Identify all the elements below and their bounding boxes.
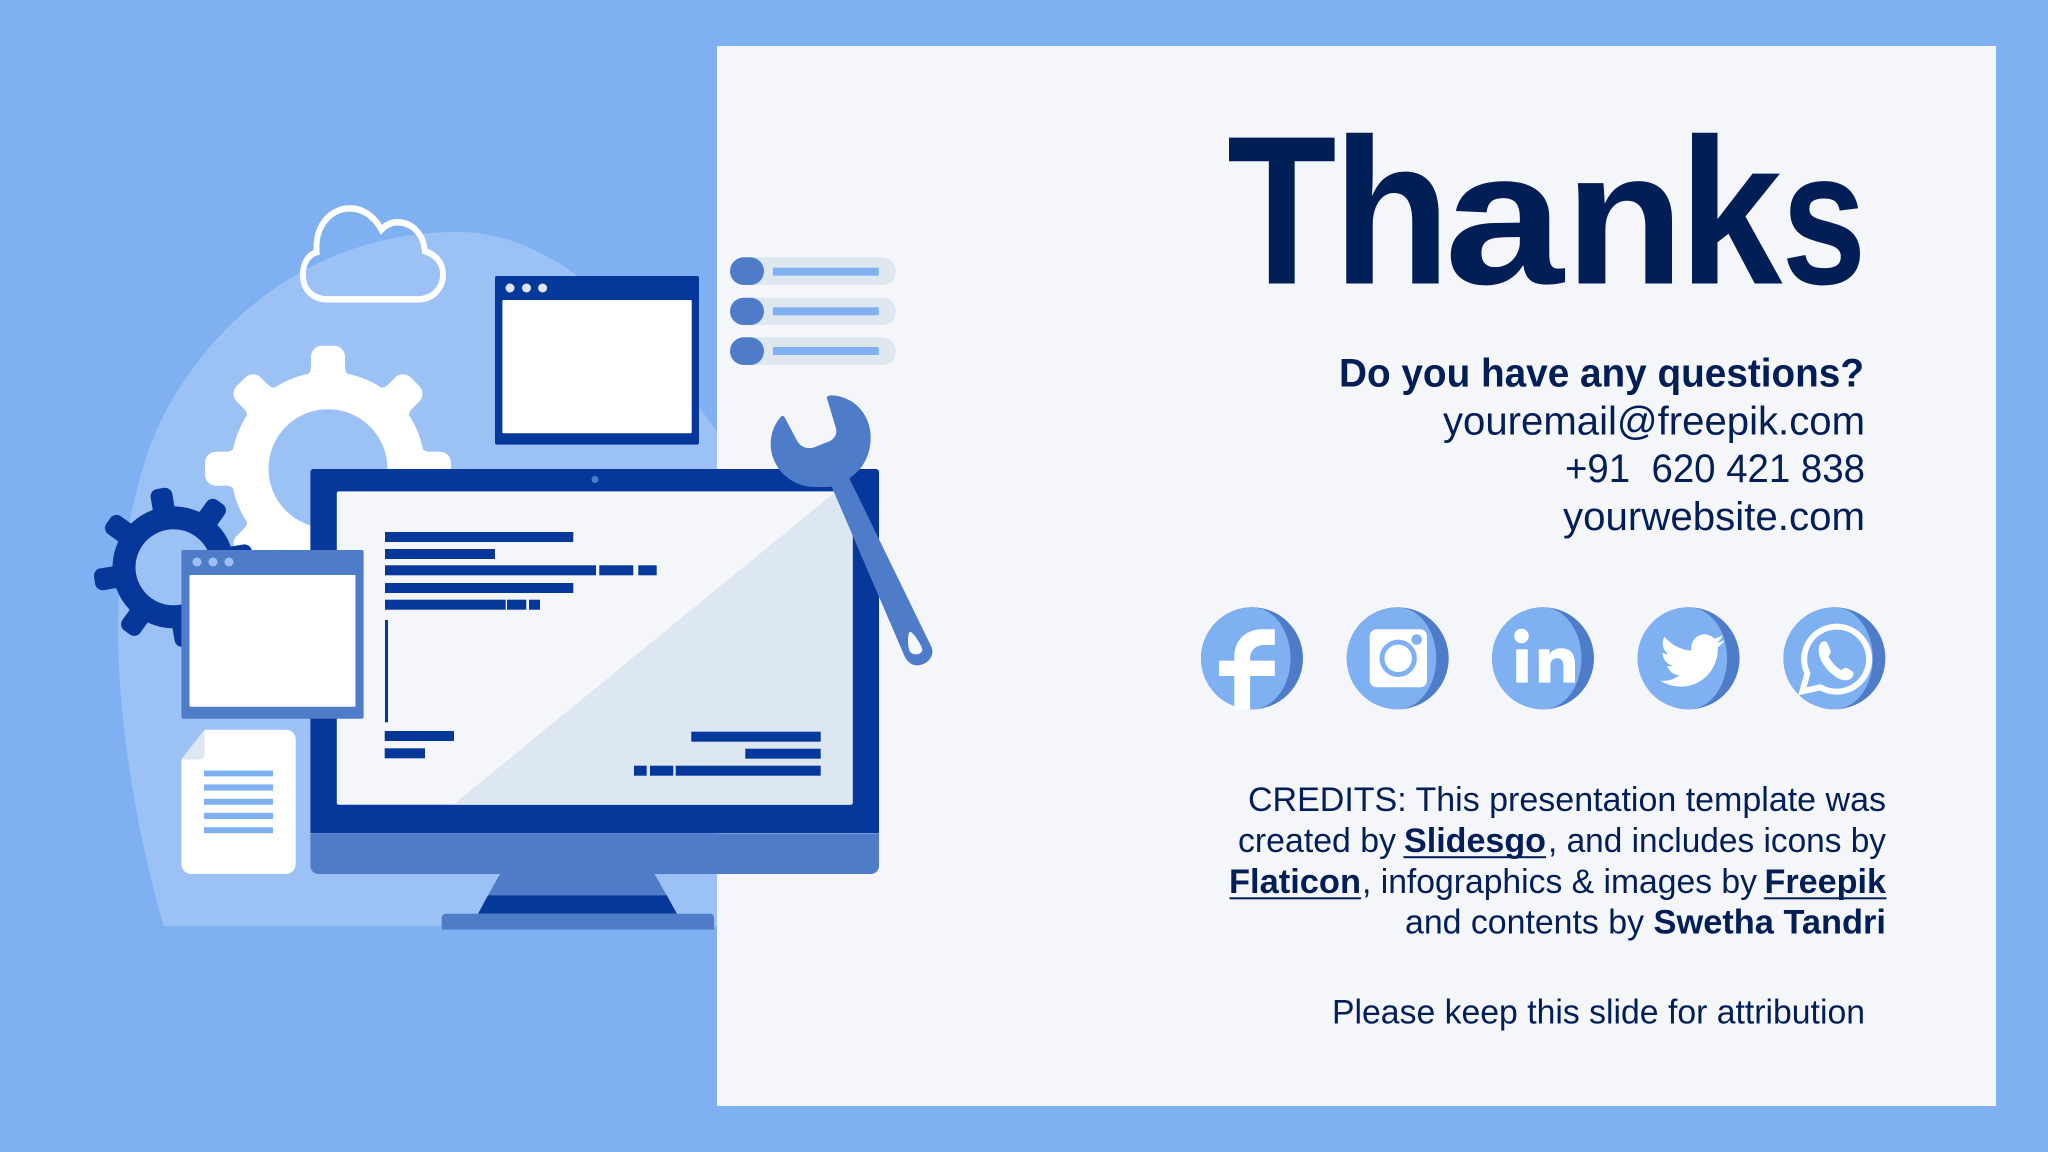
title: a — [1444, 112, 1565, 324]
code lines — [385, 532, 821, 776]
credits line 2 — [1238, 822, 1886, 860]
monitor body — [310, 469, 879, 833]
credits line 4 — [1405, 904, 1886, 942]
monitor screen — [337, 491, 853, 805]
title: k — [1679, 96, 1783, 328]
attribution note: Please keep this slide for attribution — [1332, 994, 1865, 1032]
credits line 4: and contents by — [1405, 904, 1644, 942]
title: s — [1782, 112, 1866, 324]
title — [1227, 92, 1866, 328]
icon: dark gear — [81, 475, 266, 659]
credits line 3: Freepik — [1764, 863, 1886, 901]
icon: cloud — [303, 208, 443, 299]
contact block — [1339, 352, 1865, 539]
icon: facebook — [1201, 607, 1303, 709]
social icons — [1201, 607, 1885, 709]
icon: twitter — [1638, 607, 1740, 709]
credits line 2: Slidesgo — [1404, 822, 1546, 860]
credits line 2: , and includes icons by — [1548, 822, 1886, 860]
panel: content card — [717, 46, 1996, 1106]
browser window: dark — [495, 276, 699, 445]
credits text — [1229, 781, 1886, 942]
icon: instagram — [1347, 607, 1449, 709]
title: h — [1333, 96, 1451, 328]
credits line 3: , infographics & images by — [1362, 863, 1757, 901]
icon: wrench — [771, 395, 932, 665]
title: n — [1565, 112, 1684, 324]
icon: document — [181, 730, 296, 874]
monitor chin — [310, 833, 879, 874]
screen diagonal — [453, 491, 853, 805]
list pills — [730, 257, 896, 365]
credits line 1: CREDITS: This presentation template was — [1248, 781, 1886, 819]
icon: white gear — [205, 346, 451, 575]
background blob — [118, 232, 717, 926]
icon: whatsapp — [1783, 607, 1885, 709]
title: T — [1227, 92, 1336, 328]
question heading: Do you have any questions? — [1339, 352, 1864, 396]
credits line 4: Swetha Tandri — [1654, 904, 1886, 942]
monitor stand — [442, 874, 714, 930]
browser window: medium — [181, 550, 364, 719]
illustration: computer maintenance — [81, 208, 932, 930]
icon: linkedin — [1492, 607, 1594, 709]
email: youremail@freepik.com — [1443, 400, 1865, 444]
website: yourwebsite.com — [1563, 495, 1865, 539]
camera dot — [592, 476, 598, 483]
monitor — [310, 469, 879, 930]
credits line 3 — [1229, 863, 1886, 901]
phone: +91 620 421 838 — [1565, 447, 1865, 491]
credits line 3: Flaticon — [1229, 863, 1361, 901]
credits line 2: created by — [1238, 822, 1396, 860]
